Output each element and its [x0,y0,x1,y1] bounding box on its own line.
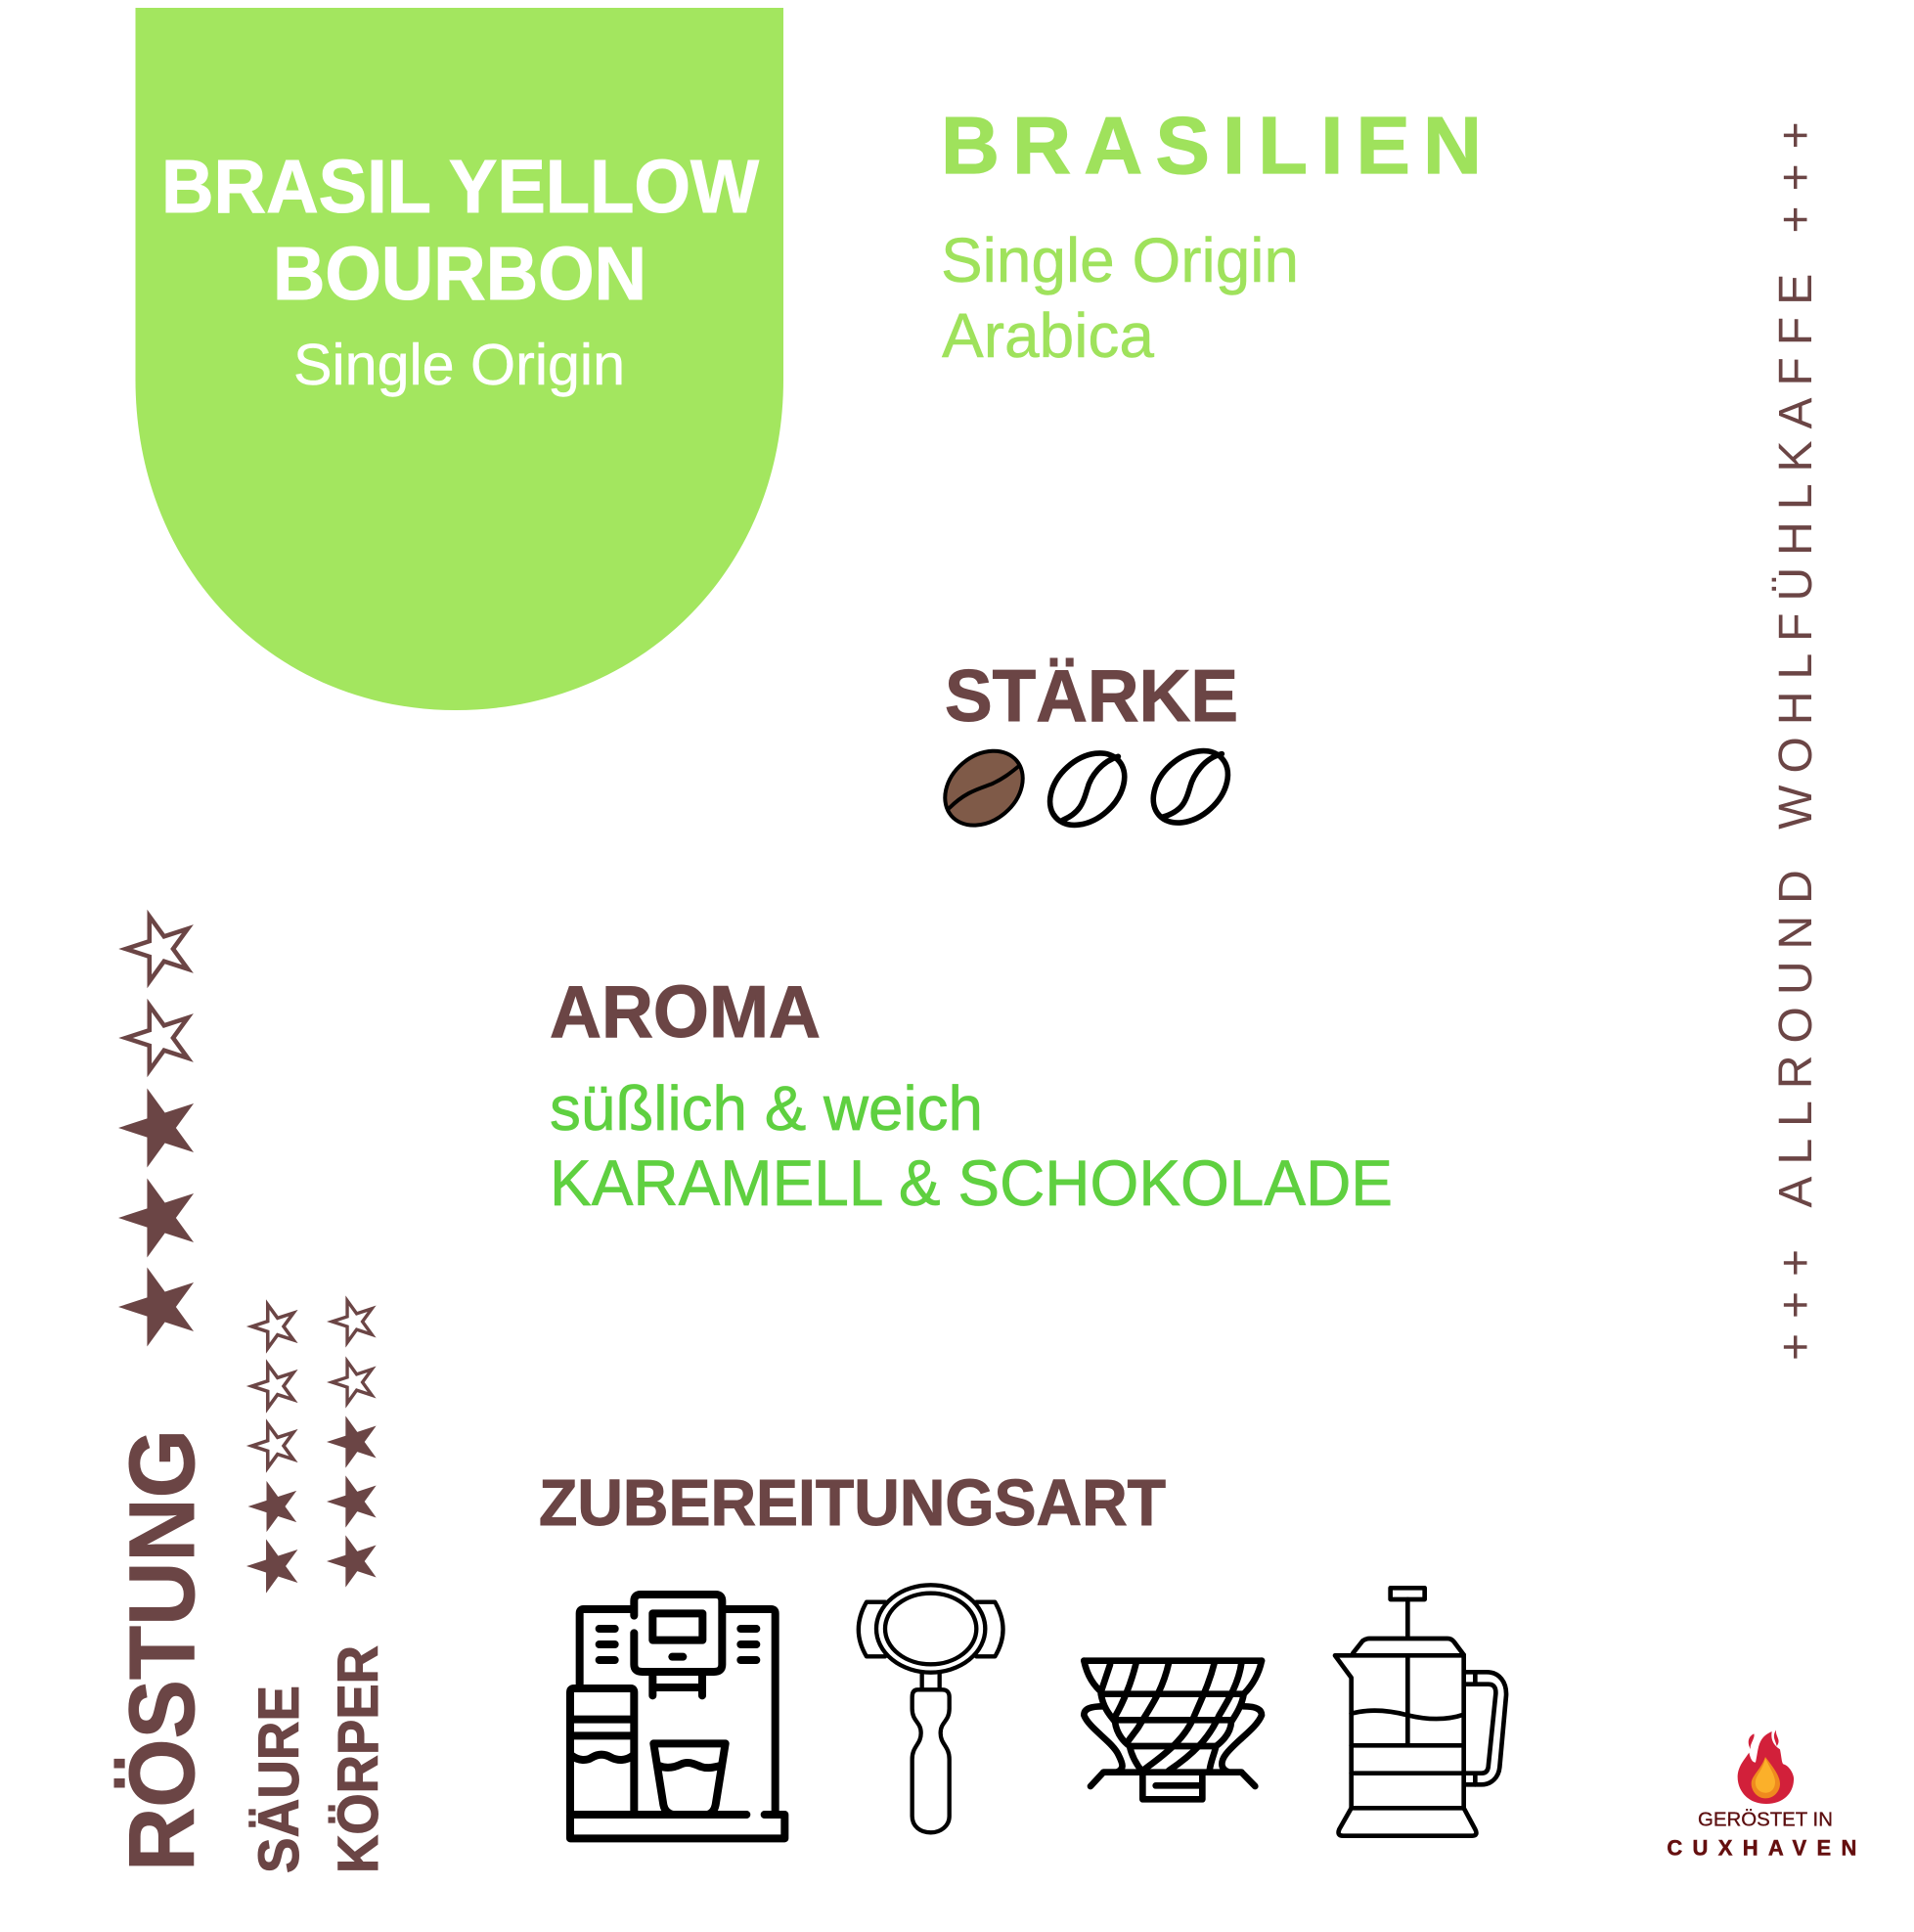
text block: aroma description: süßlich & weich [550,1073,983,1144]
rating: roast stars [118,917,194,1347]
title: product name line 2: BOURBON [273,232,646,316]
icon: filled bean [930,736,1038,840]
heading: strength: STÄRKE [945,654,1238,737]
icon: portafilter [859,1585,1003,1832]
text block: origin details: Arabica [942,300,1154,371]
rating: body stars [327,1301,377,1588]
icons: preparation methods (machine and portafilter) [570,1585,1003,1838]
rating: acidity stars [246,1305,297,1594]
text: roasted in: GERÖSTET IN [1698,1810,1833,1831]
heading: preparation: ZUBEREITUNGSART [539,1466,1166,1540]
subtitle: single origin: Single Origin [293,333,625,397]
icon: flame [1738,1730,1794,1804]
panel: green label shield [135,8,783,710]
icon: empty bean [1139,737,1242,837]
icon: french press [1335,1588,1506,1836]
text block: aroma description [550,1073,1393,1219]
title: product name line 1: BRASIL YELLOW [161,145,759,229]
icons: strength beans [930,736,1242,840]
heading: origin country: BRASILIEN [941,100,1482,191]
heading: aroma: AROMA [550,970,821,1053]
icons: preparation methods (dripper and french press) [1084,1588,1506,1836]
text block: origin details: Single Origin [941,225,1299,295]
label: body: KÖRPER [327,1645,390,1873]
vertical slogan: +++ ALLROUND WOHLFÜHLKAFFE +++ [1770,107,1822,1361]
text block: origin details [941,225,1299,371]
logo: roasted in Cuxhaven [1667,1730,1856,1861]
icon: pour-over dripper [1084,1661,1262,1799]
label: roast: RÖSTUNG [111,1429,214,1871]
text block: aroma description: KARAMELL & SCHOKOLADE [550,1146,1393,1219]
text: Cuxhaven: CUXHAVEN [1667,1836,1856,1861]
icon: empty bean [1036,739,1138,839]
icon: coffee machine [570,1595,784,1838]
label: acidity: SÄURE [247,1685,311,1873]
